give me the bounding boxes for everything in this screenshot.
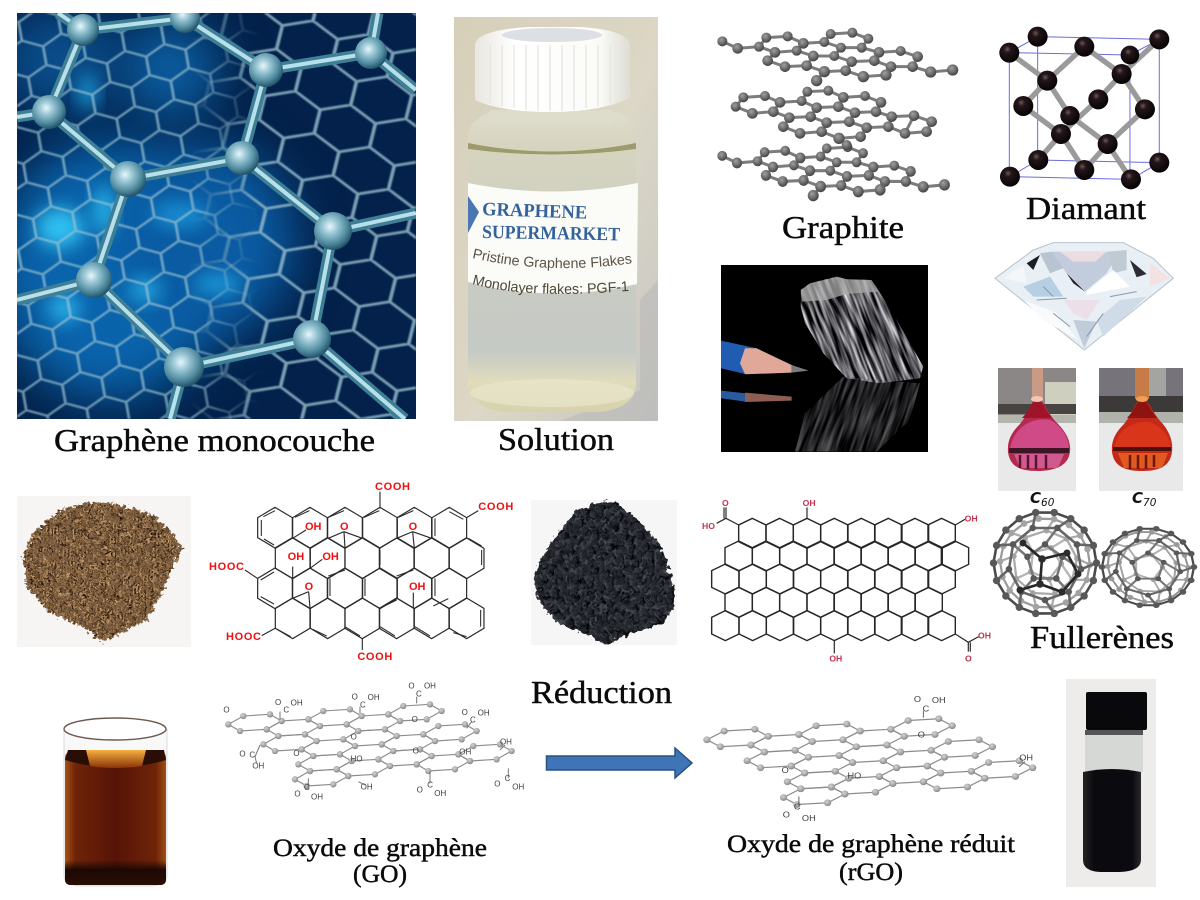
3D structure: graphene oxide sheet: C: [249, 750, 255, 759]
vial label: SUPERMARKET: [482, 222, 621, 245]
chemical structure: reduced graphene oxide: [702, 498, 991, 664]
vial body: [468, 112, 636, 412]
3D structure: graphene oxide sheet: O: [417, 786, 423, 795]
fullerene C70 molecule: [1095, 518, 1200, 616]
3D structure: graphene oxide sheet: OH: [361, 782, 373, 791]
chemical structure: graphene oxide: O: [305, 581, 314, 593]
heading: Diamant: Diamant: [1026, 190, 1146, 226]
label: C70: 70: [1143, 497, 1157, 509]
large graphene bonds: [17, 13, 416, 419]
panel: graphite rock and pencil photo: [721, 265, 928, 452]
chemical structure: graphene oxide: [209, 481, 513, 663]
panel: graphène monocouche image: [0, 3, 416, 419]
white cap: [475, 27, 630, 112]
chemical structure: reduced graphene oxide: OH: [829, 654, 842, 664]
3D structure: graphene oxide sheet: [223, 681, 525, 801]
chemical structure: graphene oxide: O: [409, 521, 418, 533]
panel: C60 flask photo: [998, 368, 1076, 491]
3D structure: reduced graphene oxide sheet: [703, 694, 1036, 823]
3D structure: graphene oxide sheet: OH: [368, 693, 380, 702]
graphite layered molecule: [717, 28, 958, 201]
3D structure: graphene oxide sheet: O: [408, 681, 415, 690]
3D structure: graphene oxide sheet: C: [283, 706, 289, 715]
3D structure: reduced graphene oxide sheet: O: [783, 810, 790, 819]
3D structure: reduced graphene oxide sheet: HO: [848, 771, 861, 781]
3D structure: graphene oxide sheet: O: [275, 698, 281, 707]
chemical structure: graphene oxide: COOH: [478, 501, 513, 513]
chemical structure: reduced graphene oxide: HO: [702, 521, 715, 531]
heading: Graphite: Graphite: [782, 209, 904, 245]
3D structure: graphene oxide sheet: O: [293, 749, 300, 758]
3D structure: graphene oxide sheet: C: [304, 783, 310, 792]
3D structure: graphene oxide sheet: OH: [291, 698, 303, 707]
heading: Oxyde de graphène (GO): (GO): [353, 861, 407, 888]
heading: Solution: Solution: [498, 421, 614, 457]
chemical structure: reduced graphene oxide: OH: [965, 514, 978, 524]
panel: black reduced powder photo: [531, 500, 677, 645]
chemical structure: graphene oxide: COOH: [375, 481, 410, 493]
3D structure: graphene oxide sheet: OH: [500, 737, 512, 746]
label: C70: C: [1132, 489, 1143, 507]
chemical structure: graphene oxide: OH: [288, 551, 304, 563]
heading: Oxyde de graphène réduit (rGO): Oxyde de graphène réduit: [727, 831, 1015, 858]
chemical structure: reduced graphene oxide: O: [722, 498, 729, 508]
3D structure: reduced graphene oxide sheet: O: [782, 765, 789, 775]
graphite rock: [721, 276, 924, 452]
panel: C70 flask photo: [1099, 368, 1183, 491]
heading: Oxyde de graphène (GO): [273, 835, 487, 888]
diamond crystal structure: [999, 27, 1169, 189]
panel: solution vial photo: [454, 17, 658, 421]
chemical structure: reduced graphene oxide: OH: [803, 498, 816, 508]
heading: Oxyde de graphène réduit (rGO): [727, 831, 1015, 886]
heading: Fullerènes: Fullerènes: [1030, 619, 1174, 655]
3D structure: graphene oxide sheet: C: [470, 716, 476, 725]
3D structure: graphene oxide sheet: OH: [459, 747, 472, 756]
chemical structure: graphene oxide: O: [340, 521, 349, 533]
3D structure: graphene oxide sheet: OH: [478, 708, 490, 717]
3D structure: graphene oxide sheet: C: [505, 774, 511, 783]
3D structure: graphene oxide sheet: OH: [434, 789, 447, 798]
3D structure: graphene oxide sheet: HO: [351, 754, 363, 763]
3D structure: reduced graphene oxide sheet: C: [923, 704, 930, 713]
3D structure: reduced graphene oxide sheet: C: [794, 802, 801, 811]
chemical structure: reduced graphene oxide: O: [965, 654, 972, 664]
heading: Oxyde de graphène réduit (rGO): (rGO): [839, 859, 903, 886]
vial label: Monolayer flakes: PGF-1: [473, 274, 628, 296]
3D structure: graphene oxide sheet: OH: [512, 782, 525, 791]
3D structure: graphene oxide sheet: O: [413, 746, 419, 755]
3D structure: graphene oxide sheet: OH: [252, 762, 265, 771]
chemical structure: graphene oxide: COOH: [357, 651, 392, 663]
heading: Oxyde de graphène (GO): Oxyde de graphène: [273, 835, 487, 862]
3D structure: graphene oxide sheet: O: [412, 715, 418, 724]
vial label: [468, 183, 638, 296]
chemical structure: reduced graphene oxide: OH: [978, 630, 991, 640]
chemical structure: graphene oxide: OH: [322, 551, 339, 563]
3D structure: graphene oxide sheet: O: [352, 692, 358, 701]
label: C60: C: [1030, 489, 1041, 507]
heading: Réduction: Réduction: [531, 674, 672, 710]
3D structure: graphene oxide sheet: C: [416, 690, 422, 699]
vial label: Pristine Graphene Flakes: [473, 248, 632, 271]
3D structure: graphene oxide sheet: O: [239, 750, 246, 759]
3D structure: reduced graphene oxide sheet: OH: [1019, 753, 1033, 763]
3D structure: reduced graphene oxide sheet: OH: [802, 813, 816, 823]
3D structure: graphene oxide sheet: C: [427, 781, 433, 790]
3D structure: graphene oxide sheet: O: [294, 790, 301, 799]
3D structure: reduced graphene oxide sheet: O: [914, 694, 921, 704]
3D structure: graphene oxide sheet: O: [462, 708, 468, 717]
chemical structure: graphene oxide: OH: [409, 581, 426, 593]
heading: Graphène monocouche: Graphène monocouche: [54, 422, 375, 458]
diamond gem: [995, 243, 1173, 350]
panel: brown graphene oxide powder photo: [17, 496, 191, 647]
3D structure: graphene oxide sheet: O: [494, 780, 501, 789]
3D structure: graphene oxide sheet: OH: [424, 682, 436, 691]
arrow: reduction: [546, 748, 692, 778]
vial label: GRAPHENE: [482, 199, 587, 224]
3D structure: graphene oxide sheet: O: [223, 706, 230, 715]
label: C60: 60: [1041, 497, 1055, 509]
fullerene C60 molecule: [983, 501, 1107, 625]
panel: black rGO solution vial photo: [1066, 679, 1156, 887]
3D structure: graphene oxide sheet: OH: [311, 792, 323, 801]
chemical structure: graphene oxide: HOOC: [209, 561, 244, 573]
3D structure: reduced graphene oxide sheet: O: [918, 730, 925, 739]
chemical structure: graphene oxide: HOOC: [226, 631, 261, 643]
3D structure: graphene oxide sheet: C: [360, 700, 366, 709]
large graphene atoms: [32, 3, 387, 387]
chemical structure: graphene oxide: OH: [305, 521, 322, 533]
panel: graphene oxide solution beaker: [64, 718, 167, 886]
pencil: [721, 341, 757, 374]
3D structure: graphene oxide sheet: O: [351, 732, 357, 741]
3D structure: reduced graphene oxide sheet: OH: [932, 695, 946, 705]
